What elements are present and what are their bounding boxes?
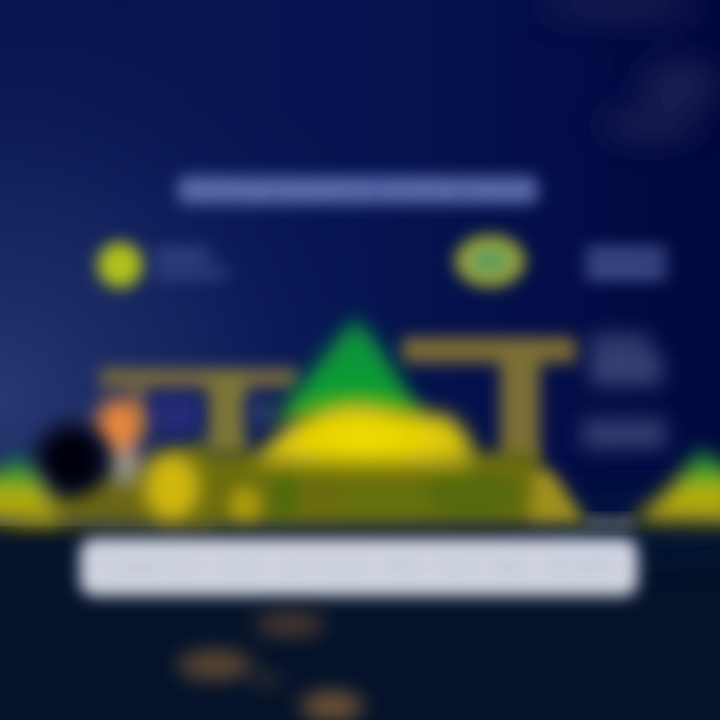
ground line (585, 516, 635, 528)
side text blocks (582, 336, 666, 448)
side text blocks: Detail text (590, 357, 644, 371)
left marker with label (97, 242, 227, 288)
left small hill (0, 456, 62, 522)
left olive ground behind figure (0, 440, 210, 526)
central foreground terrain (195, 452, 590, 526)
orange figure (96, 398, 144, 484)
brown smudges bottom (177, 612, 364, 720)
icon: green ellipse (455, 235, 525, 287)
yellow mound (255, 401, 472, 467)
icon: yellow circle (97, 242, 143, 288)
gold gate structures (100, 337, 576, 465)
right label: Label text (586, 263, 643, 278)
right small hill (630, 448, 720, 524)
black circle (37, 425, 107, 495)
green mountain peak (275, 318, 425, 420)
white caption bar: Caption text across the full bar width (99, 553, 619, 580)
yellow bush left (144, 453, 200, 521)
title: Infographic title text (183, 178, 534, 203)
sky holes under left gate (149, 396, 276, 432)
right marker with label (455, 235, 666, 287)
left label: Label text (155, 267, 208, 281)
clouds top right (540, 0, 720, 139)
right label (586, 248, 666, 278)
white caption bar (80, 538, 638, 596)
